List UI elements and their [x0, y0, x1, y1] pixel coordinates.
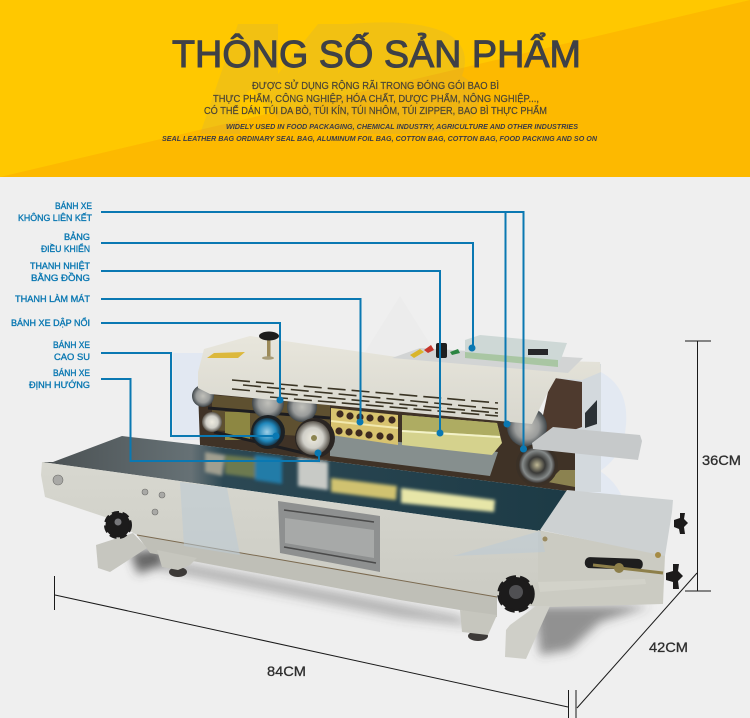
mechanism backplate [198, 390, 575, 492]
label: guide wheel [29, 368, 90, 391]
callout line: cooling bar [101, 299, 360, 422]
label: rubber wheel: CAO SU [54, 352, 90, 363]
left foot [96, 533, 147, 572]
callout dots [272, 344, 527, 456]
dimension label: height: 36CM [702, 452, 741, 468]
clear control box [465, 335, 567, 367]
right end cover [540, 490, 673, 556]
label: control panel: ĐIỀU KHIỂN [41, 243, 90, 255]
ground shadow [130, 548, 650, 655]
subtitle in English: WIDELY USED IN FOOD PACKAGING, CHEMICAL INDUSTRY, AGRICULTURE AND OTHER INDUSTRIES [226, 124, 578, 131]
callout line: control panel [101, 243, 473, 348]
label: cooling bar: THANH LÀM MÁT [15, 294, 90, 305]
label: control panel: BẢNG [64, 231, 90, 243]
belt reflections [205, 452, 495, 512]
right lower wheel [516, 444, 558, 486]
label: guide wheel: BÁNH XE [53, 368, 90, 379]
label: non-bonded wheel [18, 201, 92, 224]
pressure knob [259, 332, 279, 360]
left knob [106, 512, 130, 538]
label: embossing wheel: BÁNH XE DẬP NỔI [11, 317, 90, 329]
drive belt [208, 408, 330, 455]
ventilation slots [232, 380, 498, 416]
control switches [410, 343, 460, 358]
rear-left wheels [192, 385, 317, 432]
background watermark [173, 296, 628, 573]
callout line: guide wheel [101, 379, 319, 461]
label: non-bonded wheel: BÁNH XE [55, 201, 92, 212]
callout line: copper heat bar [101, 271, 440, 433]
cooling plates [402, 415, 502, 455]
subtitle in Vietnamese: CÓ THỂ DÁN TÚI DA BÒ, TÚI KÍN, TÚI NHÔM, TÚI ZIPPER, BAO BÌ THỰC PHẨM [204, 104, 547, 117]
callout line: embossing wheel [101, 323, 280, 400]
label: rubber wheel [53, 340, 90, 363]
front knob [499, 577, 533, 611]
callout labels [11, 201, 92, 391]
centre-left foot [157, 550, 197, 577]
callout line: rubber wheel [101, 353, 276, 436]
label: rubber wheel: BÁNH XE [53, 340, 90, 351]
machine [41, 332, 688, 659]
lower flange [137, 535, 497, 617]
title: THÔNG SỐ SẢN PHẨM [172, 31, 581, 76]
subtitle in Vietnamese: ĐƯỢC SỬ DỤNG RỘNG RÃI TRONG ĐÓNG GÓI BAO BÌ [252, 79, 499, 92]
label: copper heat bar: BẰNG ĐỒNG [31, 272, 90, 284]
right upper wheel [507, 407, 547, 447]
dimension label: length: 84CM [267, 663, 306, 679]
label: non-bonded wheel: KHÔNG LIÊN KẾT [18, 213, 92, 224]
subtitle in Vietnamese: THỰC PHẨM, CÔNG NGHIỆP, HÓA CHẤT, DƯỢC PHẨM, NÔNG NGHIỆP..., [213, 92, 539, 105]
conveyor front panel [41, 462, 540, 597]
right knobs [666, 513, 688, 589]
machine rear body [560, 362, 601, 492]
label: copper heat bar [30, 261, 90, 284]
callout lines [101, 212, 524, 461]
brass backplate patches [212, 395, 575, 487]
heating bars [331, 408, 398, 445]
subtitle in English: SEAL LEATHER BAG ORDINARY SEAL BAG, ALUMINUM FOIL BAG, COTTON BAG, COTTON BAG, FOOD PACKING AND SO ON [162, 136, 598, 143]
chrome guide wheel [295, 418, 335, 458]
right side rib [538, 579, 646, 592]
dimension lines [54, 341, 711, 718]
right conveyor end [497, 530, 665, 607]
subtitle in Vietnamese [204, 79, 547, 117]
adjustment slot and rod [542, 536, 663, 573]
subtitle in English [162, 124, 598, 143]
blue rubber wheel [251, 415, 285, 449]
conveyor screws [53, 475, 165, 515]
brown edge line [137, 535, 497, 597]
conveyor surface [42, 436, 575, 531]
right dark bracket [537, 378, 582, 443]
glass lower section [330, 435, 498, 476]
top cover [198, 336, 601, 424]
label: guide wheel: ĐỊNH HƯỚNG [29, 380, 90, 391]
control panel plate [392, 348, 583, 373]
front panel watermark tint [180, 482, 545, 556]
side slot [585, 400, 597, 428]
header banner [0, 0, 750, 177]
warning label [207, 352, 245, 358]
right foot [505, 606, 550, 659]
centre-right foot [460, 610, 497, 641]
spec plate [278, 501, 380, 572]
dimension label: depth: 42CM [649, 639, 688, 655]
callout line: wheel non-bonded second [504, 212, 506, 424]
output tray [532, 427, 642, 460]
label: copper heat bar: THANH NHIỆT [30, 261, 90, 272]
label: control panel [41, 231, 90, 255]
callout line: wheel non-bonded [101, 212, 524, 449]
